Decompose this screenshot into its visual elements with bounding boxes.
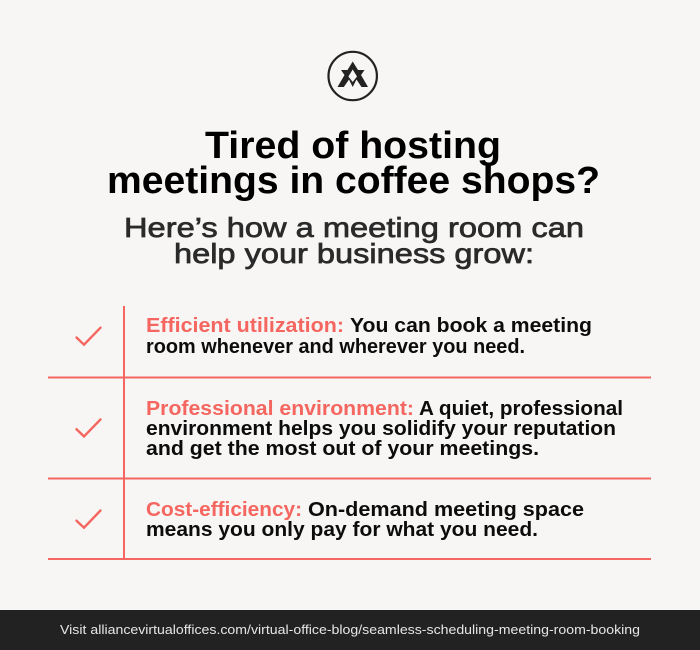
text: professional environment [146,397,623,460]
text: efficient utilization [146,314,592,358]
icon: check 3 [76,510,100,528]
footer link text: Visit alliancevirtualoffices.com/virtual-office-blog/seamless-scheduling-meeting-room-booking [60,622,640,637]
text: professional environment: and get the most out of your meetings. [146,437,539,460]
icon: check 2 [76,419,100,436]
text: professional environment: A quiet, professional [419,397,623,420]
text: efficient utilization: You can book a meeting [350,314,592,337]
text: cost-efficiency [146,498,584,541]
icon: check 1 [76,328,100,345]
icon: logo [328,52,377,100]
title: Tired of hosting [205,125,501,167]
text: efficient utilization: room whenever and wherever you need. [146,335,525,358]
title [107,125,600,202]
title: meetings in coffee shops? [107,160,600,202]
text: cost-efficiency: Cost-efficiency: [146,498,302,521]
subtitle: help your business grow: [174,238,534,269]
text: professional environment: Professional environment: [146,397,414,420]
subtitle: Here’s how a meeting room can [124,212,584,243]
table grid lines [48,306,651,559]
text: efficient utilization: Efficient utilization: [146,314,344,337]
subtitle [124,212,584,269]
text: cost-efficiency: means you only pay for what you need. [146,518,538,541]
text: cost-efficiency: On-demand meeting space [308,498,584,521]
footer bar [0,610,700,650]
text: professional environment: environment helps you solidify your reputation [146,417,616,440]
